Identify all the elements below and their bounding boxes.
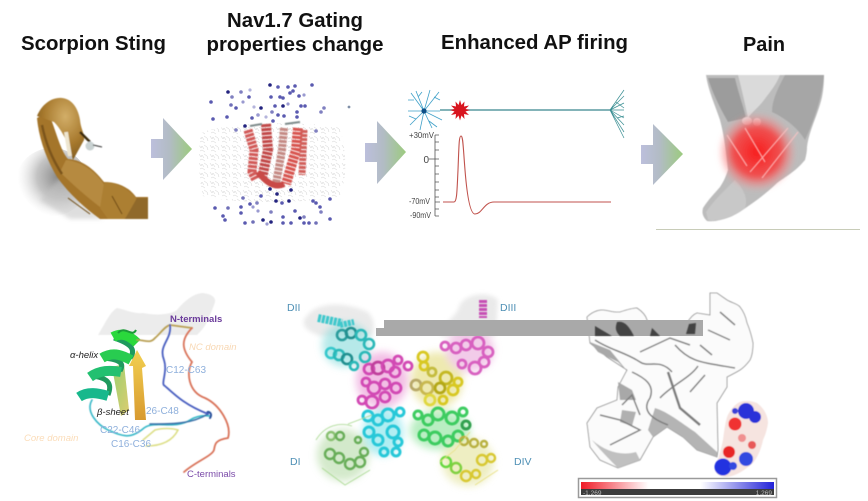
DIII magenta helices (441, 300, 493, 374)
beta sheet ribbons (112, 364, 129, 416)
voltage labels: 0 (423, 155, 429, 166)
central yellow helices (411, 352, 462, 405)
alpha helix (79, 330, 137, 397)
ribbon labels: C12-C63 (166, 365, 206, 376)
neuron (408, 90, 624, 138)
electrostatic colour scale bar: 1.269 (756, 490, 772, 497)
domain labels (287, 302, 532, 468)
ribbon labels (24, 314, 237, 480)
telson bulb (37, 98, 84, 160)
image: scorpion tail with stinger (16, 98, 148, 219)
title: Nav1.7 Gating properties change: properties change (206, 34, 384, 56)
voltage labels (409, 130, 434, 220)
ions (209, 83, 350, 226)
voltage axis (429, 135, 440, 216)
channel helices (248, 122, 304, 186)
domain labels: DIII (500, 302, 516, 314)
image: foot held by hands with red pain area (656, 75, 860, 230)
light and dark hand tones (738, 75, 780, 118)
action potential trace (443, 136, 611, 214)
toxin surface hood (98, 293, 215, 335)
stimulus starburst (450, 100, 470, 120)
voltage labels: -90mV (410, 210, 431, 220)
central green helices (414, 408, 470, 446)
domain labels: DIV (514, 456, 532, 468)
voltage labels: -70mV (409, 196, 430, 206)
density hoods (304, 294, 498, 336)
lipid membrane (199, 123, 345, 202)
tail segments (37, 112, 148, 219)
ribbon labels: β-sheet (96, 407, 129, 418)
DI green helices (316, 415, 372, 485)
image: Nav1.7 channel in a membrane with ions (199, 83, 350, 226)
title: Enhanced AP firing: Enhanced AP firing (441, 32, 628, 54)
dark shaded surface over bar (595, 322, 696, 336)
translucent bulk of each domain (317, 323, 494, 486)
ribbon labels: C22-C46 (100, 425, 140, 436)
molecular surface with docked toxin (376, 293, 768, 477)
domain labels: DII (287, 302, 300, 314)
ribbon labels: 26-C48 (146, 406, 179, 417)
surface crevices (595, 312, 735, 445)
red pain glow (717, 112, 797, 192)
central magenta helices (358, 356, 412, 408)
ribbon labels: C16-C36 (111, 439, 151, 450)
DIV yellow-green helices (440, 432, 498, 485)
gray bar (376, 320, 703, 336)
title: Nav1.7 Gating properties change (206, 10, 384, 56)
ribbon labels: α-helix (70, 350, 99, 361)
domain labels: DI (290, 456, 300, 468)
central cyan helices (363, 408, 404, 456)
coil backbone (90, 325, 229, 472)
title: Scorpion Sting: Scorpion Sting (21, 33, 166, 55)
neuron diagram with action potential (408, 90, 624, 220)
ribbon labels: N-terminals (170, 314, 222, 325)
protein toxin ribbon structure (24, 293, 237, 480)
electrostatic toxin surface (714, 401, 768, 477)
arrow 3 (641, 124, 683, 185)
title: Pain: Pain (743, 34, 785, 56)
grey shaded regions (592, 440, 640, 468)
DII cyan helices (318, 318, 374, 370)
ribbon labels: NC domain (189, 342, 237, 353)
electrostatic colour scale bar (578, 478, 776, 498)
ribbon labels: Core domain (24, 433, 78, 444)
electrostatic colour scale bar: -1.269 (583, 490, 602, 497)
ground line (656, 228, 860, 230)
Nav1.7 domains ribbon structure (304, 294, 498, 486)
ribbon labels: C-terminals (187, 469, 236, 480)
title: Nav1.7 Gating properties change: Nav1.7 Gating (227, 10, 363, 32)
arrow 1 (151, 118, 192, 180)
white X-shaped surface (587, 293, 753, 468)
voltage labels: +30mV (409, 130, 434, 140)
arrow 2 (365, 121, 406, 184)
